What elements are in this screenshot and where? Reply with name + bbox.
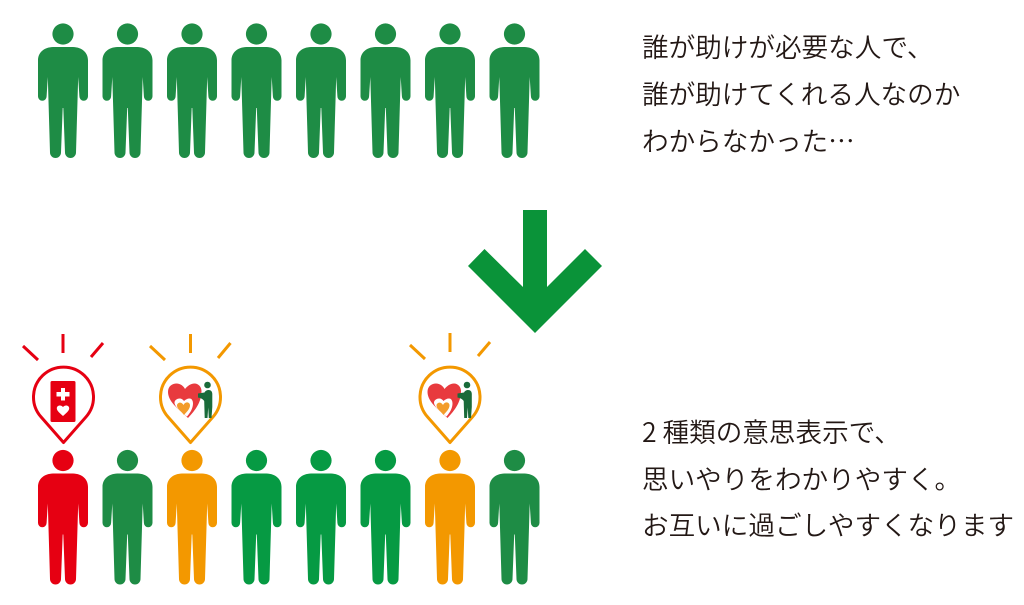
rays: orange (410, 333, 490, 359)
pin outline: red (34, 367, 94, 442)
callout: orange heart pin 2 (410, 333, 490, 442)
icon: help card (50, 381, 76, 422)
text block: before: わからなかった… (642, 120, 855, 159)
icon: heart and helper (168, 382, 212, 418)
row of eight coloured people (after) (38, 450, 540, 584)
pin outline: orange (160, 367, 220, 442)
callout: red card pin (23, 334, 103, 442)
text block: after: お互いに過ごしやすくなります (642, 504, 1014, 543)
arrow pointing down (468, 210, 602, 333)
text block: before: 誰が助けてくれる人なのか (642, 73, 960, 112)
text block: before: 誰が助けが必要な人で、 (642, 26, 933, 65)
text block: after: 思いやりをわかりやすく。 (642, 458, 961, 497)
rays: red (23, 334, 103, 360)
rays: orange (150, 334, 230, 360)
text block: after: 2 種類の意思表示で、 (642, 411, 901, 450)
text block: before (642, 26, 960, 159)
pin outline: orange (420, 367, 480, 442)
text block: after (642, 411, 1014, 543)
icon: heart and helper (428, 382, 472, 418)
row of eight green people (before) (38, 23, 540, 158)
callout: orange heart pin 1 (150, 334, 230, 442)
